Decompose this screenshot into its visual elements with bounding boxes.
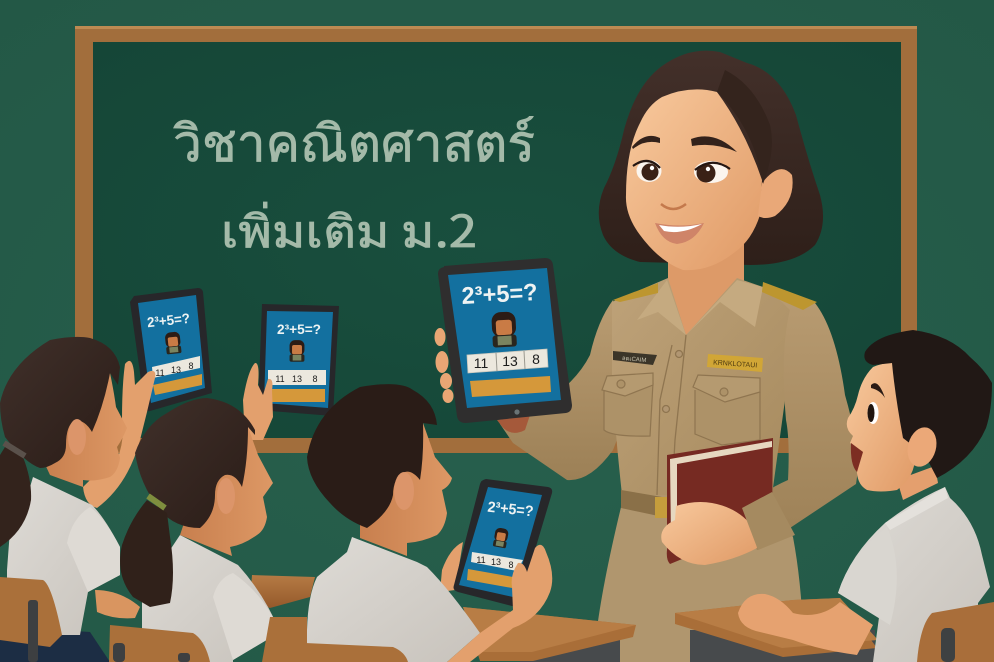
answers: 11 bbox=[474, 355, 488, 371]
ear bbox=[217, 478, 235, 514]
brows bbox=[632, 136, 660, 149]
epaulette right bbox=[762, 282, 817, 310]
neck and face bbox=[43, 373, 127, 487]
answers: 8 bbox=[532, 351, 540, 367]
hair bbox=[307, 384, 437, 528]
title: board heading line 1: วิชาคณิตศาสตร์ bbox=[173, 102, 535, 176]
gold badge: KRNKLOTAUI bbox=[713, 359, 757, 370]
ponytail bbox=[120, 500, 173, 607]
tablet: student 3: 2³+5=? bbox=[487, 499, 534, 520]
hair back bbox=[599, 51, 823, 265]
nose bbox=[661, 204, 686, 209]
hand holding tablet bbox=[434, 328, 530, 433]
tablet: student 2: 11 bbox=[275, 374, 285, 384]
face bbox=[847, 363, 915, 492]
tablet: teacher bbox=[438, 258, 572, 423]
hand on book bbox=[661, 502, 757, 565]
tablet: student 1: 8 bbox=[188, 361, 194, 371]
eyes bbox=[636, 160, 662, 182]
chair bbox=[917, 602, 994, 662]
shirt bbox=[838, 487, 990, 662]
hair tie bbox=[4, 443, 25, 456]
skirt bbox=[0, 630, 110, 662]
hair tie bbox=[148, 496, 165, 508]
mouth bbox=[655, 223, 704, 244]
shirt bbox=[142, 535, 280, 662]
brow bbox=[871, 383, 885, 398]
mouth bbox=[851, 443, 863, 472]
neck and face bbox=[180, 427, 273, 556]
answers bbox=[467, 349, 548, 373]
arm and hand bbox=[738, 594, 873, 655]
gold badge bbox=[707, 354, 763, 372]
shirt bbox=[7, 477, 120, 635]
face bbox=[626, 89, 762, 270]
chair bbox=[109, 625, 210, 662]
epaulette left bbox=[613, 283, 658, 302]
tablet: student 1: 13 bbox=[171, 365, 181, 375]
student 4: boy at right with desk bbox=[675, 330, 994, 662]
title: board heading line 2: เพิ่มเติม ม.2 bbox=[221, 196, 477, 260]
chair bbox=[0, 577, 62, 647]
left hand bbox=[440, 542, 463, 592]
lower arm bbox=[95, 590, 140, 618]
neck and face bbox=[360, 423, 452, 556]
hair top fringe bbox=[717, 70, 772, 184]
desk behind left students bbox=[250, 575, 315, 608]
tablet: student 3: 13 bbox=[491, 557, 501, 567]
tablet: student 3: 8 bbox=[508, 560, 514, 570]
hair bbox=[864, 330, 992, 478]
tablet avatar bbox=[491, 311, 517, 348]
skirt bbox=[594, 495, 804, 662]
tablet: student 1: 11 bbox=[155, 368, 165, 378]
desk bbox=[690, 630, 875, 662]
tablet: student 2: 2³+5=? bbox=[277, 321, 321, 337]
shirt bbox=[307, 537, 480, 662]
teacher bbox=[434, 51, 858, 662]
sleeve cuff bbox=[742, 492, 795, 550]
home button bbox=[514, 409, 520, 415]
student 3: boy centre with tablet bbox=[262, 384, 636, 662]
name badge bbox=[613, 351, 657, 365]
orange bar bbox=[470, 376, 551, 397]
ear bbox=[903, 424, 941, 470]
tablet equation: 2³+5=? bbox=[461, 279, 538, 310]
collar bbox=[637, 280, 686, 335]
answers: 13 bbox=[502, 353, 518, 369]
student 3: right arm and hand bbox=[447, 545, 552, 662]
left pocket bbox=[602, 373, 653, 436]
right pocket bbox=[693, 375, 760, 445]
tablet: student 2 bbox=[258, 304, 339, 416]
tablet: student 2: 8 bbox=[312, 374, 318, 384]
raised hand bbox=[243, 363, 273, 440]
ear bbox=[68, 419, 86, 455]
raised arm bbox=[83, 361, 155, 508]
eye bbox=[868, 402, 878, 424]
neck bbox=[668, 240, 744, 335]
torso bbox=[612, 278, 795, 495]
hair bbox=[135, 398, 255, 528]
neck bbox=[897, 466, 938, 500]
book bbox=[667, 438, 773, 564]
tablet: student 2: 13 bbox=[292, 374, 302, 384]
ponytail bbox=[0, 447, 31, 547]
hair bbox=[0, 337, 120, 468]
left sleeve bbox=[500, 300, 640, 480]
desk bbox=[520, 640, 620, 662]
tablet: student 3 bbox=[454, 479, 552, 606]
ear bbox=[394, 472, 414, 510]
tablet: student 1: 2³+5=? bbox=[146, 310, 191, 330]
belt bbox=[621, 490, 668, 518]
student 1: girl at far left bbox=[0, 337, 155, 662]
student 2: girl with green tie bbox=[109, 363, 280, 662]
foreground chair bbox=[282, 642, 408, 662]
chair at far back bbox=[262, 617, 307, 662]
right sleeve bbox=[740, 284, 858, 550]
placket and buttons bbox=[657, 335, 686, 495]
panel: chalkboard bbox=[75, 26, 917, 453]
ear bbox=[758, 169, 793, 218]
tablet: student 1 bbox=[130, 288, 212, 411]
name badge: ลดเCAIM bbox=[622, 356, 647, 364]
tablet: student 3: 11 bbox=[476, 555, 486, 565]
